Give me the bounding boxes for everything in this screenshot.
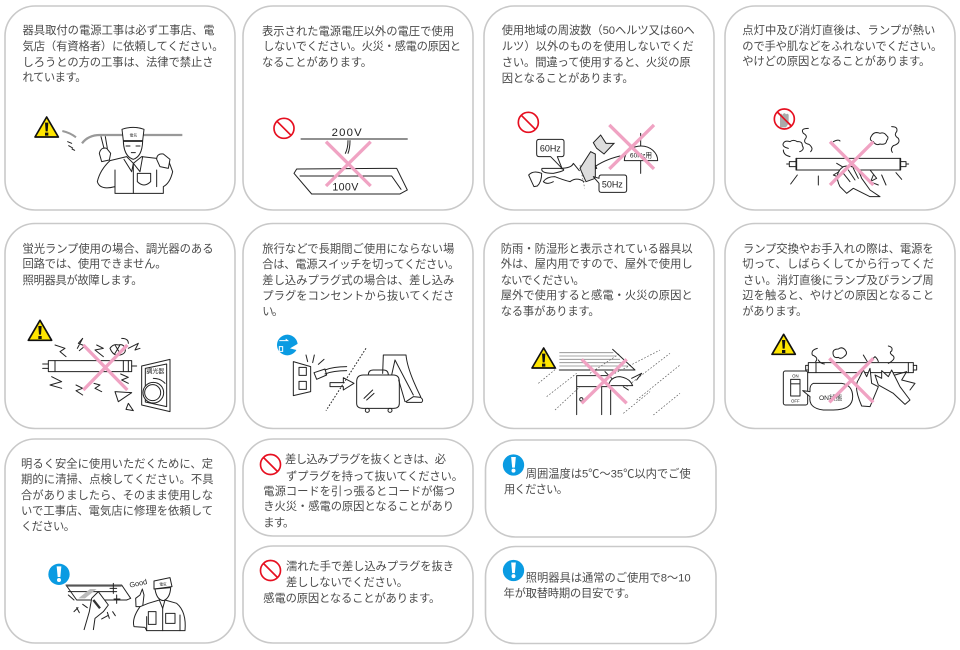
panel: electrical work by qualified installer	[5, 6, 235, 210]
text: dimmer warning: 照明器具が故障します。	[22, 273, 142, 287]
illustration: switch, lamp and hands	[772, 334, 917, 410]
panel: turn off power before maintenance	[725, 224, 955, 428]
illustration: Japan frequency map	[518, 112, 658, 192]
icon: prohibited	[261, 561, 280, 580]
text: dimmer warning: 回路では、使用できません。	[22, 256, 166, 270]
text: hot lamp warning: ので手や肌などをふれないでください。	[742, 39, 942, 53]
icon: info	[503, 454, 524, 476]
text: maintenance warning: があります。	[742, 304, 807, 318]
illustration: lamp and dimmer switch: 調光器	[146, 367, 164, 375]
illustration: 200V line and 100V fixture: 100V	[332, 182, 359, 194]
text: hot lamp warning: 点灯中及び消灯直後は、ランプが熱い	[742, 23, 935, 37]
illustration: unplugged outlet and suitcase traveller	[277, 335, 423, 412]
panel: hot lamp warning	[725, 6, 955, 210]
panel: ambient temperature	[486, 440, 716, 537]
text: voltage warning: なることがあります。	[262, 55, 372, 69]
illustration: 200V line and 100V fixture: 200V	[332, 127, 362, 139]
illustration: hand touching hot lamp	[774, 109, 909, 197]
text: periodic cleaning: いで工事店、電気店に修理を依頼して	[21, 504, 213, 518]
text: pull by the plug: 電源コードを引っ張るとコードが傷つ	[263, 484, 455, 498]
illustration: lamp and dimmer switch	[28, 320, 170, 412]
panel: periodic cleaning and inspection	[5, 439, 235, 643]
illustration: switch, lamp and hands: ON状態	[819, 393, 843, 402]
text: maintenance warning: ランプ交換やお手入れの際は、電源を	[743, 242, 934, 256]
text: outdoor use warning: 外は、屋内用ですので、屋外で使用し	[501, 256, 693, 270]
text: periodic cleaning: 期的に清掃、点検してください。不具	[21, 472, 214, 486]
illustration: switch, lamp and hands: ON	[792, 373, 799, 378]
illustration: 200V line and 100V fixture	[274, 118, 407, 194]
text: outdoor use warning: 屋外で使用すると感電・火災の原因と	[501, 288, 693, 302]
illustration: cleaning fixture with electrician: Good	[129, 577, 148, 590]
text: periodic cleaning: ください。	[21, 520, 75, 533]
text: ambient temperature: 用ください。	[504, 483, 568, 496]
panel: frequency warning	[484, 6, 714, 210]
icon: info	[503, 560, 524, 581]
text: maintenance warning: 切って、しばらくしてから行ってくだ	[742, 258, 934, 270]
illustration: cleaning fixture with electrician: 電気	[159, 582, 167, 587]
text: frequency warning: さい。間違って使用すると、火災の原	[502, 55, 691, 69]
text: pull by the plug: き火災・感電の原因となることがあり	[263, 499, 454, 513]
illustration: electrician with pliers: 電気	[130, 132, 137, 137]
illustration: electrician with pliers	[35, 117, 182, 193]
text: frequency warning: 因となることがあります。	[502, 71, 634, 85]
text: periodic cleaning: 明るく安全に使用いただくために、定	[21, 456, 213, 470]
illustration: Japan frequency map: 60Hz用	[630, 151, 652, 159]
text: wet hands warning: 濡れた手で差し込みプラグを抜き	[286, 559, 454, 573]
text: wet hands warning: 差ししないでください。	[286, 576, 408, 589]
text: outdoor use warning: ないでください。	[501, 274, 585, 287]
text: installer warning: 器具取付の電源工事は必ず工事店、電	[22, 23, 214, 37]
text: installer warning: 気店（有資格者）に依頼してください。	[22, 39, 224, 53]
text: unplug when unused: 差し込みプラグ式の場合は、差し込み	[262, 273, 454, 287]
text: pull by the plug: 差し込みプラグを抜くときは、必	[285, 452, 446, 466]
text: frequency warning: ルツ）以外のものを使用しないでくだ	[502, 39, 694, 53]
panel: unplug when unused	[243, 224, 473, 428]
text: maintenance warning: 辺を触ると、やけどの原因となること	[742, 288, 934, 302]
illustration: Japan frequency map: 50Hz	[602, 179, 623, 189]
text: installer warning: しろうとの方の工事は、法律で禁止さ	[22, 55, 214, 69]
text: outdoor use warning: 防雨・防湿形と表示されている器具以	[501, 242, 693, 256]
text: wet hands warning: 感電の原因となることがあります。	[263, 591, 440, 605]
text: pull by the plug: ます。	[263, 516, 294, 530]
text: replacement period: 照明器具は通常のご使用で8～10	[526, 570, 691, 584]
text: replacement period: 年が取替時期の目安です。	[504, 586, 636, 600]
panel: outdoor use warning	[484, 224, 714, 428]
illustration: cleaning fixture with electrician	[48, 564, 185, 631]
text: unplug when unused: 旅行などで長期間ご使用にならない場	[262, 242, 454, 256]
illustration: Japan frequency map: 60Hz	[540, 144, 561, 154]
text: unplug when unused: プラグをコンセントから抜いてくださ	[262, 288, 454, 302]
text: voltage warning: 表示された電源電圧以外の電圧で使用	[262, 24, 454, 38]
text: unplug when unused: 合は、電源スイッチを切ってください。	[262, 257, 459, 271]
panel: voltage warning	[243, 6, 473, 210]
illustration: fixture outdoors in rain	[532, 348, 680, 415]
text: unplug when unused: い。	[262, 306, 283, 318]
illustration: switch, lamp and hands: OFF	[791, 398, 800, 403]
panel: replacement period	[486, 546, 716, 644]
text: voltage warning: しないでください。火災・感電の原因と	[263, 39, 461, 53]
text: maintenance warning: さい。消灯直後にランプ及びランプ周	[743, 273, 934, 287]
text: periodic cleaning: 合がありましたら、そのまま使用しな	[21, 488, 213, 502]
panel: dimmer warning	[5, 224, 235, 428]
text: hot lamp warning: やけどの原因となることがあります。	[742, 54, 930, 68]
panel: wet hands warning	[243, 546, 473, 643]
text: frequency warning: 使用地域の周波数（50ヘルツ又は60ヘ	[502, 23, 695, 37]
text: outdoor use warning: なる事があります。	[501, 304, 600, 318]
panel: pull by the plug	[243, 439, 473, 536]
icon: prohibited	[261, 455, 280, 474]
text: pull by the plug: ずプラグを持って抜いてください。	[286, 469, 463, 483]
text: dimmer warning: 蛍光ランプ使用の場合、調光器のある	[22, 242, 214, 256]
text: installer warning: れています。	[22, 71, 86, 84]
text: ambient temperature: 周囲温度は5℃～35℃以内でご使	[526, 466, 691, 480]
